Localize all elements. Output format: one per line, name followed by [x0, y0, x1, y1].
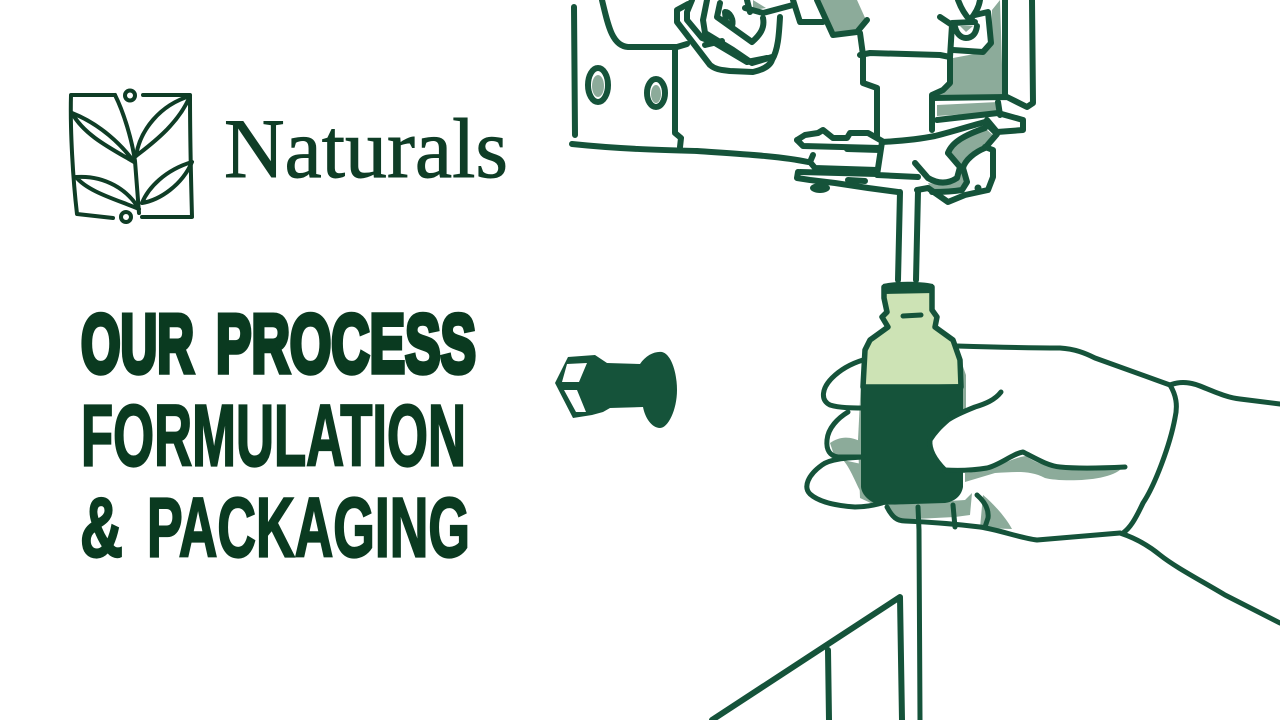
logo: Naturals	[71, 90, 508, 222]
heading: our process: OUR	[81, 297, 194, 390]
machine linework	[572, 0, 1033, 280]
machine rivets	[810, 183, 982, 193]
thumb notch	[930, 411, 964, 470]
illustration: conveyor frame	[712, 597, 902, 720]
heading: packaging	[80, 480, 470, 574]
heading: our process: PROCESS	[216, 297, 476, 390]
hand shading	[830, 350, 1122, 529]
bottle: glass	[863, 287, 961, 387]
brand name: Naturals	[224, 102, 508, 196]
heading: packaging: &	[80, 480, 123, 574]
heading: formulation: FORMULATION	[81, 388, 466, 484]
bottle cap band	[883, 282, 934, 294]
heading: packaging: PACKAGING	[147, 480, 470, 574]
hand linework	[807, 346, 1280, 720]
icon: bottle cap	[555, 352, 677, 428]
title	[80, 297, 476, 574]
icon: leaf frame	[71, 90, 192, 222]
illustration: hand holding bottle	[807, 282, 1280, 720]
illustration: filling machine	[572, 0, 1033, 280]
bottle neck dash	[903, 315, 921, 316]
bottle: dark liquid	[861, 384, 963, 505]
machine grey fills	[592, 0, 1003, 192]
heading: our process	[81, 297, 476, 390]
